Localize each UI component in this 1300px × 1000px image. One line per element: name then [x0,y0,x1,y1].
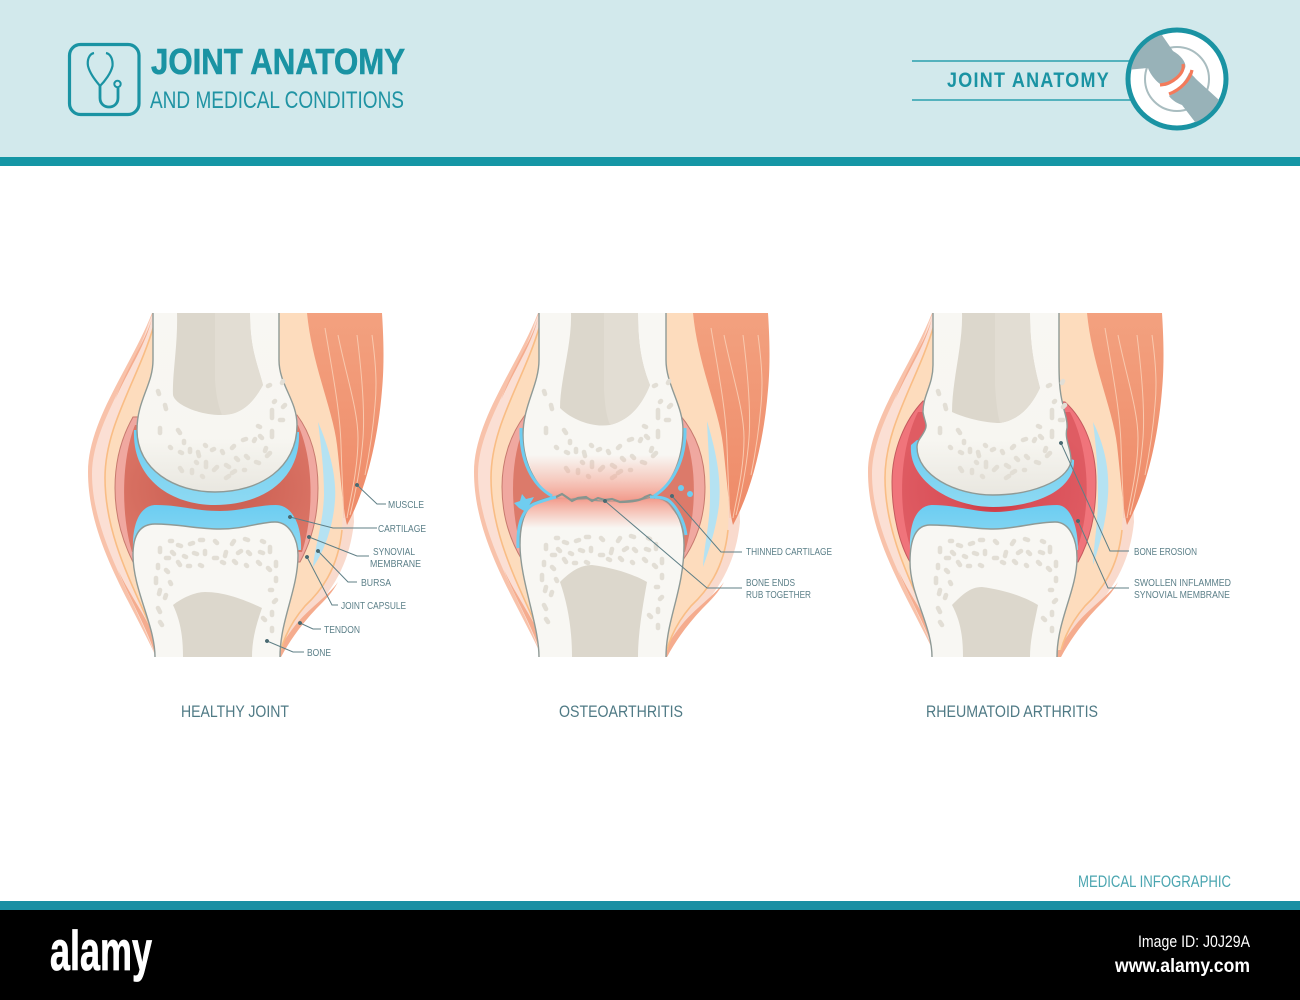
panel: osteoarthritis [474,313,832,657]
lower marrow [560,565,647,657]
labels: BONE EROSION [1134,547,1197,558]
bone speckles [156,381,285,631]
bursa [1093,422,1108,565]
labels: RUB TOGETHER [746,590,811,601]
labels: SYNOVIAL MEMBRANE [1134,590,1230,601]
soft tissue and muscle [474,313,770,657]
upper marrow [560,313,650,426]
badge lines [912,61,1135,100]
title: JOINT ANATOMY [151,41,405,82]
lower bone [910,522,1077,657]
labels: CARTILAGE [378,524,426,535]
swollen synovial membrane [892,401,1096,562]
bone speckles [936,381,1065,631]
bursa [703,421,720,567]
upper cartilage [134,430,299,505]
caption: rheumatoid arthritis: RHEUMATOID ARTHRITIS [926,702,1098,721]
badge title: JOINT ANATOMY [947,69,1110,92]
lower bone [133,522,298,657]
labels: TENDON [324,625,360,636]
caption: osteoarthritis: OSTEOARTHRITIS [559,702,683,721]
footer rule [0,901,1300,910]
rough bone contact [530,494,655,505]
labels: JOINT CAPSULE [341,601,406,612]
labels: BONE ENDS [746,578,795,589]
bone speckles [542,381,671,628]
footer note: MEDICAL INFOGRAPHIC [1078,872,1231,891]
upper bone [523,313,683,501]
lower cartilage [133,505,301,550]
thinned cartilage [514,428,693,548]
labels [1059,441,1231,601]
labels: BONE [307,648,331,659]
labels: THINNED CARTILAGE [746,547,832,558]
icon: stethoscope logo [70,44,139,114]
subtitle: AND MEDICAL CONDITIONS [150,87,404,114]
header band [0,0,1300,157]
lower marrow [173,592,262,657]
upper cartilage [911,440,1074,507]
lower marrow [952,587,1038,657]
lower cartilage [910,505,1078,550]
caption: healthy joint: HEALTHY JOINT [181,702,289,721]
labels [265,483,426,659]
image id: Image ID: J0J29A [1138,932,1251,951]
labels: MUSCLE [388,500,424,511]
bursa [313,422,335,567]
labels [603,494,832,601]
labels: BURSA [361,578,391,589]
footer band [0,910,1300,1000]
labels: SWOLLEN INFLAMMED [1134,578,1231,589]
inflamed bone ends [522,455,681,528]
synovial capsule [502,415,705,560]
footer logo: alamy [50,919,152,982]
upper marrow [952,313,1040,423]
labels: MEMBRANE [370,559,421,570]
website: www.alamy.com [1114,956,1250,977]
panel: rheumatoid arthritis [868,313,1231,657]
labels: SYNOVIAL [373,547,415,558]
icon: joint badge [1125,25,1230,135]
lower bone [520,498,684,657]
header rule [0,157,1300,166]
panel: healthy joint [88,313,426,659]
soft tissue and muscle [868,313,1164,657]
synovial capsule [115,415,318,562]
upper bone [137,313,297,492]
upper marrow [173,313,263,415]
soft tissue and muscle [88,313,384,657]
eroded upper bone [917,313,1071,495]
